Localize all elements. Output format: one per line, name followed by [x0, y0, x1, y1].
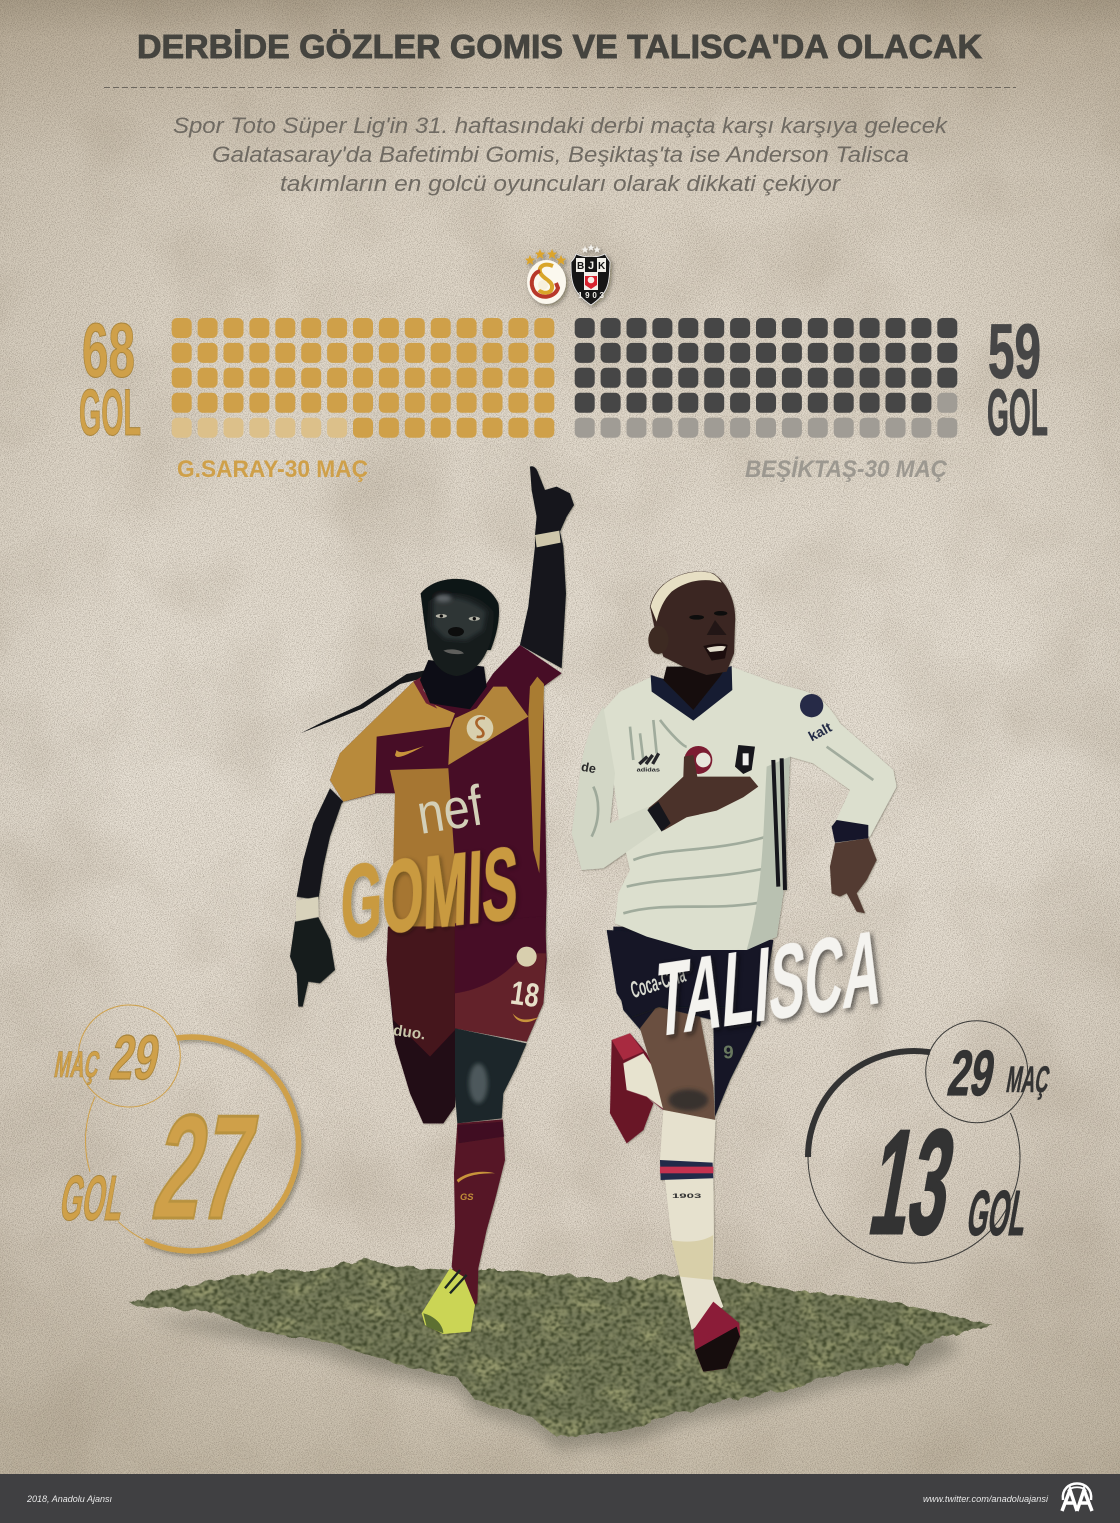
- collar and neck: [651, 666, 732, 721]
- Galatasaray goal total: [79, 308, 141, 449]
- sleeve stripes: [773, 758, 785, 890]
- left hand and wrist: [832, 820, 868, 843]
- Talisca upper body: de: [580, 760, 597, 776]
- lower arm and hand: [297, 788, 343, 900]
- head: [650, 571, 735, 675]
- icon: Besiktas crest: J: [588, 260, 594, 272]
- Gomis hair strand: [301, 670, 427, 733]
- Talisca legs: 9: [723, 1041, 734, 1062]
- stat circle: Gomis: [52, 1005, 299, 1251]
- stat circle: Gomis: 27: [144, 1084, 268, 1250]
- small match circle: [78, 1005, 180, 1107]
- icon: Besiktas crest: [571, 244, 610, 305]
- icon: Besiktas crest: 1903: [578, 291, 605, 300]
- jersey shading: [592, 720, 873, 913]
- shorts: [607, 930, 773, 1027]
- thin arcs: [85, 1097, 145, 1240]
- Talisca upper body: Coca-Cola: [627, 961, 689, 1003]
- Talisca legs: [610, 927, 767, 1372]
- intro paragraph: [173, 113, 949, 196]
- player: Talisca: [572, 571, 897, 1372]
- Talisca legs: 1903: [672, 1193, 702, 1200]
- Gomis upper body: [290, 466, 574, 1007]
- match label: 29: [944, 1037, 1000, 1109]
- footer bar: [0, 1474, 1120, 1523]
- player: Gomis: [290, 466, 574, 1334]
- stat circle: Talisca: [808, 1021, 1053, 1265]
- label: Besiktas matches: BEŞİKTAŞ-30 MAÇ: [745, 456, 948, 483]
- Talisca upper body: adidas: [637, 768, 660, 774]
- intro paragraph: Galatasaray'da Bafetimbi Gomis, Beşiktaş'ta ise Anderson Talisca: [212, 142, 909, 167]
- Galatasaray goal total: 68: [82, 308, 135, 394]
- title: DERBİDE GÖZLER GOMIS VE TALISCA'DA OLACAK: [137, 28, 982, 65]
- player name: Talisca: TALISCA: [653, 908, 885, 1060]
- grass patch: [129, 1258, 993, 1449]
- intro paragraph: Spor Toto Süper Lig'in 31. haftasındaki derbi maçta karşı karşıya gelecek: [173, 113, 949, 138]
- head: [427, 593, 493, 676]
- stat circle: Gomis: 29: [106, 1023, 165, 1093]
- label: Galatasaray matches: G.SARAY-30 MAÇ: [177, 456, 368, 483]
- match label: MAÇ: [52, 1043, 103, 1085]
- thick arc: [808, 1051, 930, 1157]
- jersey: [603, 667, 897, 950]
- Gomis legs: 18: [508, 975, 541, 1015]
- Talisca upper body: [572, 571, 897, 1027]
- neck: [420, 660, 487, 709]
- stat circle: Gomis: GOL: [56, 1162, 130, 1234]
- right hand and wrist: [648, 755, 758, 831]
- thin arc: [808, 1113, 1020, 1263]
- icon: Anadolu Agency logo: [1062, 1484, 1092, 1511]
- Besiktas goal total: 59: [988, 309, 1041, 395]
- stat circle: Talisca: MAÇ: [1004, 1058, 1053, 1100]
- stat circle: Talisca: GOL: [963, 1177, 1033, 1249]
- Gomis legs: GS: [460, 1192, 474, 1202]
- Gomis legs: duo.: [392, 1022, 427, 1043]
- Gomis legs: [387, 917, 547, 1334]
- sponsor nef: nef: [413, 774, 487, 847]
- hair: [421, 579, 499, 650]
- icon: Galatasaray crest: [525, 249, 566, 304]
- Besiktas goal total: [987, 309, 1048, 449]
- raised arm: [520, 466, 574, 668]
- Talisca upper body: kalt: [806, 719, 835, 744]
- crest and swoosh: [467, 715, 493, 742]
- intro paragraph: takımların en golcü oyuncuları olarak dikkati çekiyor: [280, 171, 842, 196]
- icon: Besiktas crest: B: [577, 261, 584, 272]
- icon: Besiktas crest: K: [598, 261, 606, 272]
- waffle chart: Galatasaray goals: [172, 318, 554, 438]
- text: GOL: [79, 375, 141, 449]
- goal label: 13: [860, 1099, 966, 1265]
- small match circle: [926, 1021, 1028, 1123]
- waffle chart: Besiktas goals: [575, 318, 957, 438]
- copyright: 2018, Anadolu Ajansı: [26, 1494, 112, 1505]
- thick arc: [145, 1037, 299, 1251]
- social link: www.twitter.com/anadoluajansi: [923, 1494, 1049, 1505]
- player name: Gomis: GOMIS: [339, 824, 519, 960]
- flag and crests: [684, 746, 712, 774]
